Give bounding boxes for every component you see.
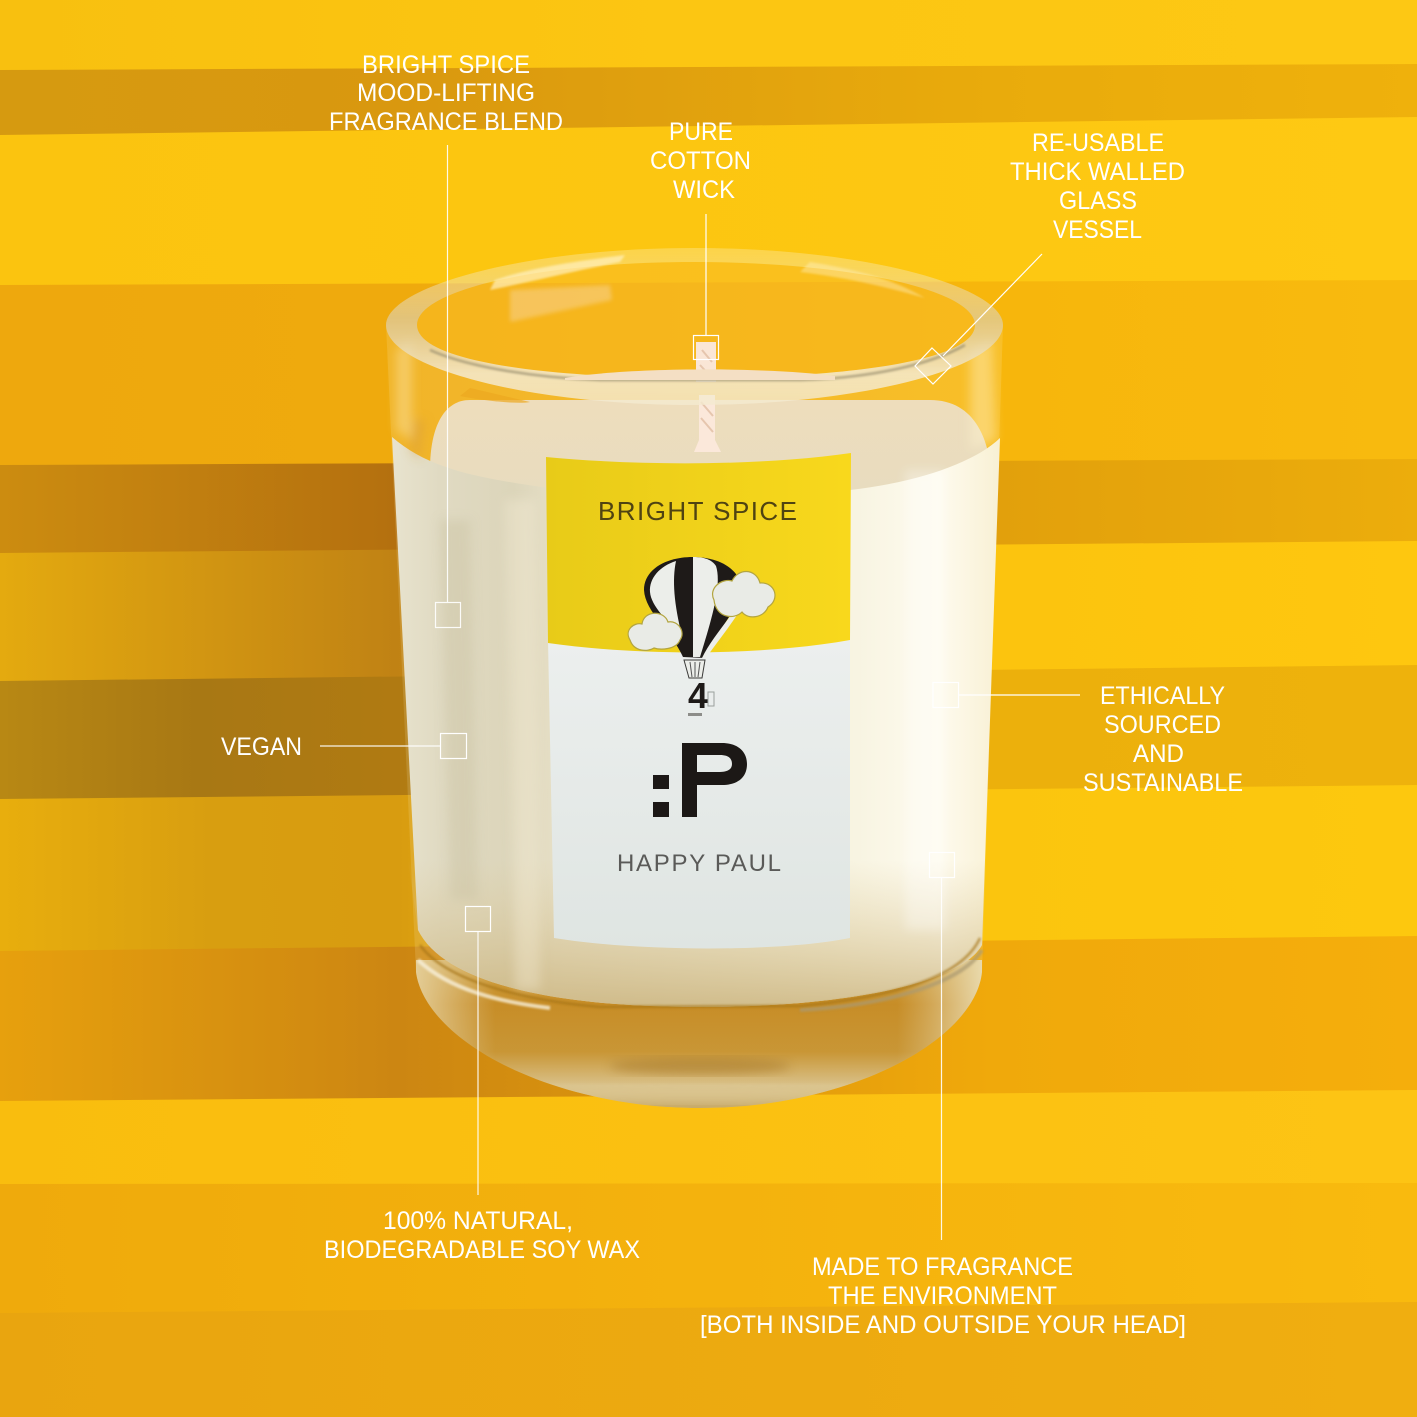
callout: bright spice fragrance: FRAGRANCE BLEND <box>329 108 563 136</box>
callout: natural soy wax <box>324 906 640 1264</box>
cloud right <box>713 571 775 617</box>
callout: natural soy wax: 100% NATURAL, <box>383 1207 573 1235</box>
wax surface seen through glass <box>430 400 992 520</box>
callout: made to fragrance: [BOTH INSIDE AND OUTSIDE YOUR HEAD] <box>700 1311 1186 1339</box>
glass bottom rim line <box>418 960 550 1008</box>
candle in glass vessel <box>386 248 1003 1108</box>
wax body <box>392 437 1000 1007</box>
callout: re-usable glass vessel: VESSEL <box>1053 216 1142 244</box>
callout: re-usable glass vessel: THICK WALLED <box>1010 158 1185 186</box>
callout: ethically sourced <box>933 682 1243 797</box>
callout: made to fragrance: THE ENVIRONMENT <box>828 1282 1057 1310</box>
callout: natural soy wax: BIODEGRADABLE SOY WAX <box>324 1236 640 1264</box>
callout: re-usable glass vessel: RE-USABLE <box>1032 129 1164 157</box>
callout: bright spice fragrance <box>329 51 563 628</box>
glass body <box>386 248 1003 1108</box>
glass side reflections <box>396 340 996 990</box>
callout: bright spice fragrance: MOOD-LIFTING <box>357 79 535 107</box>
callout: ethically sourced: ETHICALLY <box>1100 682 1225 710</box>
wick <box>694 342 721 452</box>
callout: pure cotton wick: COTTON <box>650 147 751 175</box>
callout: ethically sourced: SOURCED <box>1104 711 1221 739</box>
numeral four: 4 <box>688 675 708 716</box>
callout: vegan: VEGAN <box>221 733 302 761</box>
callout: vegan <box>221 733 466 761</box>
callout: pure cotton wick: WICK <box>673 176 735 204</box>
icon: hot air balloon with clouds <box>628 557 775 716</box>
label title: BRIGHT SPICE <box>598 496 797 526</box>
callout: re-usable glass vessel <box>915 129 1185 384</box>
callout: made to fragrance <box>700 852 1186 1339</box>
callout: made to fragrance: MADE TO FRAGRANCE <box>812 1253 1073 1281</box>
cloud left <box>628 613 682 650</box>
callout: bright spice fragrance: BRIGHT SPICE <box>362 51 530 79</box>
callout: re-usable glass vessel: GLASS <box>1059 187 1137 215</box>
callout: ethically sourced: AND <box>1133 740 1184 768</box>
product label <box>546 453 851 948</box>
glass base <box>416 960 982 1108</box>
label yellow panel <box>546 453 851 652</box>
brand mark <box>653 743 747 817</box>
label white panel <box>548 640 850 948</box>
glass rim <box>386 248 1003 405</box>
callout: pure cotton wick <box>650 118 751 360</box>
brand name: HAPPY PAUL <box>617 850 781 877</box>
inner orange surface <box>417 262 975 378</box>
callout: ethically sourced: SUSTAINABLE <box>1083 769 1243 797</box>
callout: pure cotton wick: PURE <box>669 118 733 146</box>
